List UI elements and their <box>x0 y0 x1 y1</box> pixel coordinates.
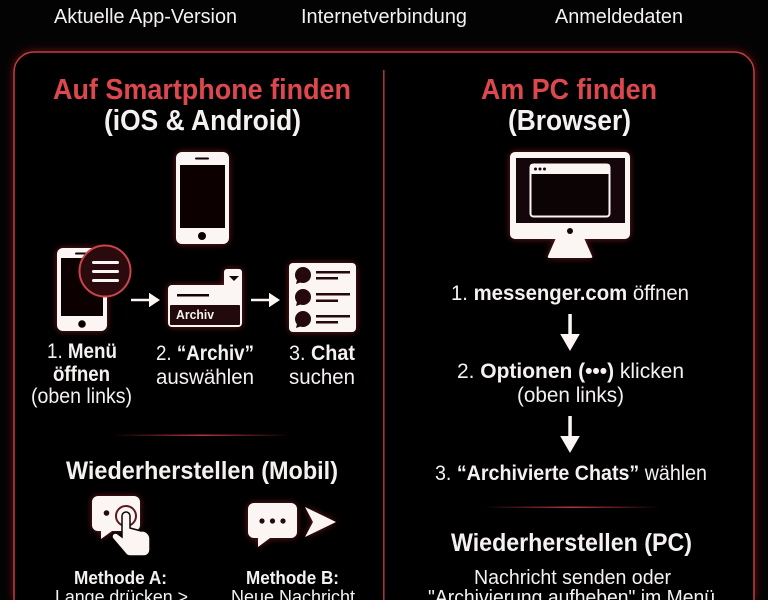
icon: chat list <box>289 263 356 332</box>
section divider: pc <box>484 506 660 508</box>
method A text <box>55 567 188 600</box>
arrow: step 1 to 2 <box>131 293 160 307</box>
arrow: step 2 to 3 <box>251 293 280 307</box>
step 1 pc: 1. messenger.com öffnen <box>451 281 689 305</box>
restore pc text <box>428 566 715 600</box>
step 2 label: auswählen <box>156 365 254 389</box>
heading: restore pc: Wiederherstellen (PC) <box>451 529 692 557</box>
heading: smartphone: Auf Smartphone finden <box>53 74 351 106</box>
section divider: mobile <box>113 434 290 436</box>
icon: archive folder: Archiv <box>176 308 214 322</box>
step 3 label: 3. Chat <box>289 341 355 365</box>
method B text: Methode B: <box>246 567 339 588</box>
heading: smartphone: (iOS & Android) <box>104 105 301 137</box>
restore pc text: Nachricht senden oder <box>474 566 671 589</box>
step 1 label: 1. Menü <box>47 339 117 363</box>
arrow: pc step 2 to 3 <box>560 416 580 453</box>
heading: pc: (Browser) <box>508 105 631 137</box>
icon: large phone <box>176 152 229 244</box>
panel: pc <box>428 74 715 600</box>
step 2 pc: 2. Optionen (•••) klicken <box>457 359 684 383</box>
icon: new message send <box>248 503 336 547</box>
step 1 label: (oben links) <box>31 384 132 408</box>
method B text <box>231 567 355 600</box>
step 2 pc: (oben links) <box>517 383 624 407</box>
heading: restore mobile: Wiederherstellen (Mobil) <box>66 457 338 485</box>
step 2 label: 2. “Archiv” <box>156 341 254 365</box>
method A text: Methode A: <box>74 567 167 588</box>
step 1 label <box>31 339 132 408</box>
step 3 pc: 3. “Archivierte Chats” wählen <box>435 461 707 485</box>
panel: smartphone <box>31 74 356 600</box>
label: app version: Aktuelle App-Version <box>54 6 237 28</box>
top checklist labels <box>54 6 683 28</box>
heading: smartphone <box>53 74 351 137</box>
label: internet connection: Internetverbindung <box>301 6 467 28</box>
icon: phone with menu <box>57 246 130 331</box>
heading: pc <box>481 74 657 137</box>
icon: monitor <box>510 152 630 258</box>
heading: pc: Am PC finden <box>481 74 657 106</box>
step 1 label: öffnen <box>53 362 110 386</box>
center divider <box>383 70 385 600</box>
step 2 label <box>156 341 254 389</box>
icon: long press <box>92 496 150 556</box>
arrow: pc step 1 to 2 <box>560 314 580 351</box>
step 3 label <box>289 341 355 389</box>
step 2 pc <box>457 359 684 407</box>
label: login data: Anmeldedaten <box>555 6 683 28</box>
step 3 label: suchen <box>289 365 355 389</box>
icon: archive folder <box>168 269 242 327</box>
